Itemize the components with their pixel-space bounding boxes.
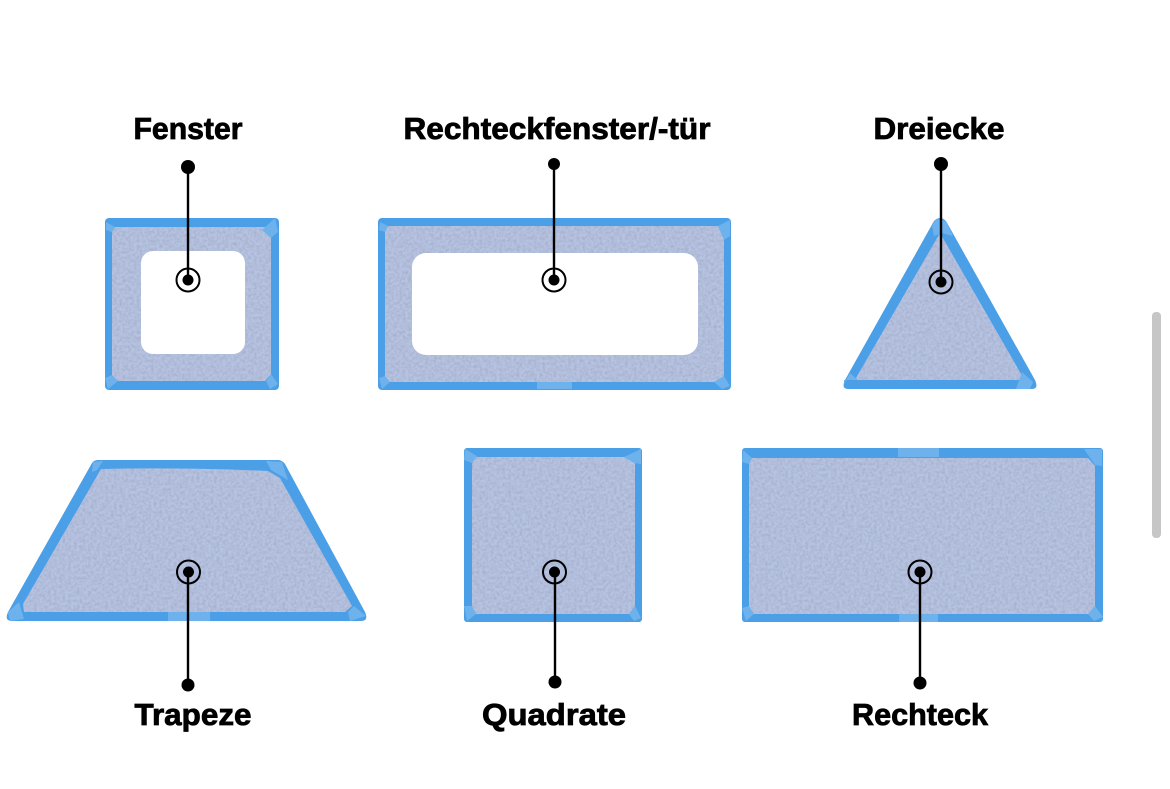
- label: Trapeze: Trapeze: [134, 697, 252, 732]
- shape: rectangle panel: [742, 448, 1103, 622]
- callout pointer: Trapeze: [177, 560, 200, 692]
- callout pointer: Dreiecke: [930, 157, 952, 294]
- label: Rechteckfenster/-tür: Rechteckfenster/-tür: [404, 111, 710, 146]
- label: Dreiecke: Dreiecke: [874, 111, 1004, 146]
- shape: rectangular window panel: [378, 218, 731, 390]
- label: Fenster: Fenster: [134, 111, 242, 146]
- scrollbar: [1152, 312, 1161, 538]
- callout pointer: Quadrate: [543, 560, 566, 688]
- label: Rechteck: Rechteck: [852, 697, 989, 732]
- shape: square window panel: [105, 218, 279, 390]
- label: Quadrate: Quadrate: [482, 697, 626, 732]
- shape: trapezoid panel: [7, 460, 366, 621]
- shape: triangle panel: [844, 218, 1036, 389]
- callout pointer: Fenster: [176, 160, 200, 292]
- shape: square panel: [464, 448, 642, 622]
- callout pointer: Rechteckfenster: [542, 158, 566, 292]
- callout pointer: Rechteck: [908, 560, 932, 690]
